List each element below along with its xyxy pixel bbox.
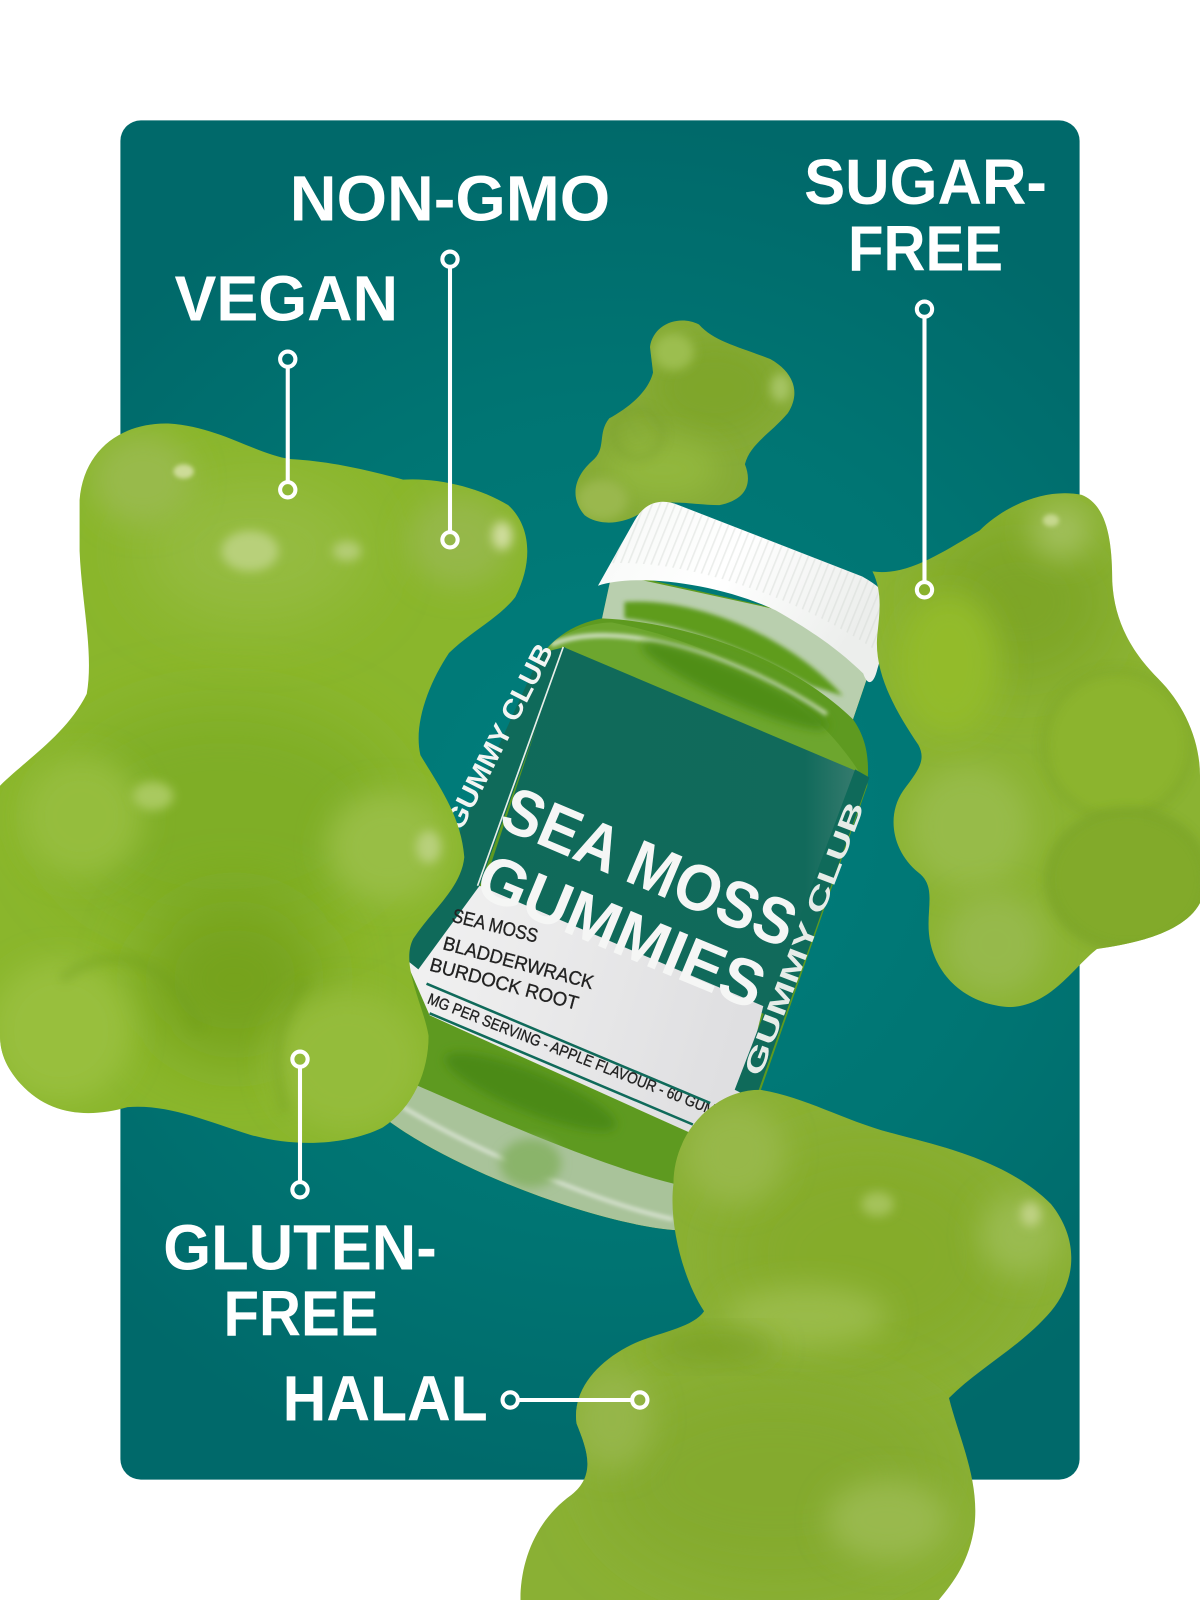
callout: sugar-free: FREE	[848, 212, 1003, 284]
callout: halal: HALAL	[283, 1362, 488, 1434]
callout: non-gmo	[290, 162, 610, 547]
ingredients list: BLADDERWRACK	[441, 933, 596, 994]
bottle label: dark panel	[480, 647, 857, 1015]
ingredients list	[427, 905, 596, 1015]
product name: SEA MOSS	[491, 772, 807, 961]
brand text left: GUMMY CLUB	[439, 638, 559, 834]
callout: vegan: VEGAN	[174, 262, 398, 334]
gummy bear: large left	[0, 413, 536, 1153]
bottle label: white panel	[406, 886, 763, 1133]
ingredients list: SEA MOSS	[450, 905, 540, 948]
callout: gluten-free	[163, 1052, 437, 1350]
label rule	[427, 984, 710, 1124]
callout: vegan	[174, 262, 398, 497]
callout: gluten-free: GLUTEN-	[163, 1211, 437, 1283]
bottle label: right strip	[735, 769, 869, 1100]
callout: halal	[283, 1362, 647, 1434]
bottle label: strip divider	[478, 647, 563, 886]
panel: teal background	[120, 120, 1080, 1480]
callout: gluten-free: FREE	[223, 1278, 379, 1350]
callout: sugar-free	[804, 146, 1047, 597]
brand text right: GUMMY CLUB	[738, 797, 870, 1080]
gummy bear: right	[867, 480, 1200, 1015]
bottle label: left strip	[403, 647, 565, 969]
product name	[467, 772, 807, 1023]
serving line: MG PER SERVING - APPLE FLAVOUR - 60 GUMMIES	[425, 991, 750, 1132]
product name: GUMMIES	[467, 839, 776, 1023]
callout: non-gmo: NON-GMO	[290, 162, 610, 234]
callout: sugar-free: SUGAR-	[804, 146, 1047, 218]
bottle glass	[390, 580, 868, 1230]
product bottle	[378, 502, 898, 1245]
gummy bear: bottom right	[510, 1082, 1087, 1600]
small gummy bear: top center	[576, 320, 794, 523]
bottle cap	[598, 502, 893, 682]
ingredients list: BURDOCK ROOT	[427, 954, 581, 1015]
right bear lobes	[1044, 671, 1200, 949]
